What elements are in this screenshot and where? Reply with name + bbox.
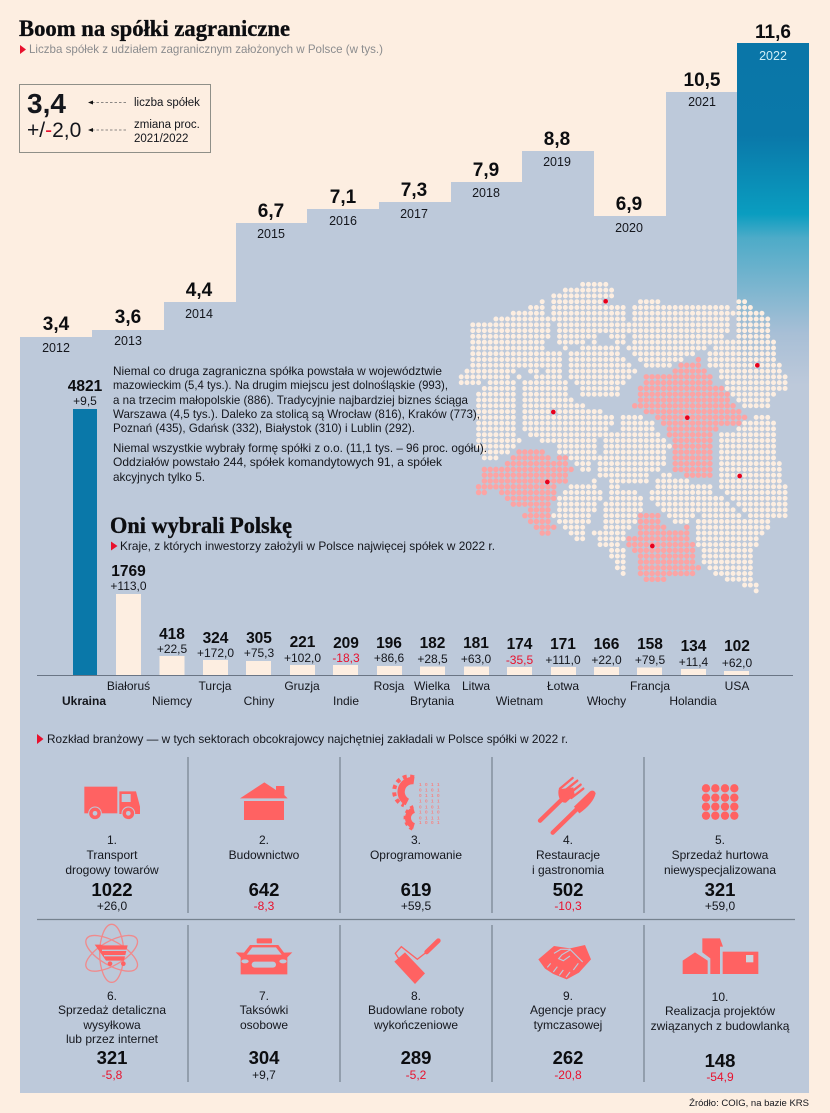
- legend: 2021/2022: [134, 133, 188, 145]
- values: [68, 378, 753, 670]
- values: 418: [159, 626, 185, 643]
- sector 10: construction projects: Realizacja projektów: [665, 1004, 775, 1018]
- sector 3: software: 619: [401, 879, 431, 900]
- step chart values: 3,6: [115, 307, 141, 328]
- sector 7: taxis: Taksówki: [240, 1003, 288, 1017]
- values: 324: [203, 630, 229, 647]
- map of Poland: [461, 284, 785, 591]
- country labels: Wietnam: [496, 694, 543, 708]
- map dots: pink regions: [479, 360, 745, 579]
- icon: gear and binary digits: 1011: [419, 799, 440, 804]
- country labels: Francja: [630, 679, 670, 693]
- sector 8: finishing works: [368, 941, 464, 1082]
- sector 5: wholesale: [664, 784, 776, 913]
- sector 6: online retail: 6.: [107, 989, 117, 1003]
- step chart values: 2020: [615, 221, 643, 235]
- text block: regions: Oddziałów powstało 244, spółek komandytowych 91, a spółek: [113, 455, 443, 469]
- values: 158: [637, 636, 663, 653]
- sector 1: transport: drogowy towarów: [65, 863, 159, 877]
- step chart values: 8,8: [544, 129, 570, 150]
- values: +102,0: [284, 651, 321, 665]
- icon: truck: [84, 787, 140, 820]
- icon: fork and knife: [540, 778, 596, 833]
- country labels: Niemcy: [152, 694, 192, 708]
- subheading: sectors: Rozkład branżowy — w tych sektorach obcokrajowcy najchętniej zakładali w Polsce spółki w 2022 r.: [47, 732, 568, 746]
- sector 1: transport: 1.: [107, 833, 117, 847]
- country labels: Białoruś: [107, 679, 150, 693]
- sector 1: transport: +26,0: [97, 899, 128, 913]
- country labels: Indie: [333, 694, 359, 708]
- sector 7: taxis: 7.: [259, 989, 269, 1003]
- values: +22,5: [157, 642, 188, 656]
- values: 221: [290, 634, 316, 651]
- sector 9: temp agencies: 9.: [563, 989, 573, 1003]
- sector 1: transport: [65, 787, 159, 913]
- icon: gear and binary digits: 1011: [419, 782, 440, 787]
- step chart values: 6,7: [258, 201, 284, 222]
- source: Źródło: COIG, na bazie KRS: [689, 1098, 809, 1109]
- legend: liczba spółek: [134, 97, 200, 109]
- sector 10: construction projects: 148: [705, 1050, 735, 1071]
- values: +28,5: [417, 652, 448, 666]
- sector 5: wholesale: +59,0: [705, 899, 736, 913]
- text block: regions: Poznań (435), Gdańsk (332), Białystok (310) i Lublin (292).: [113, 421, 415, 435]
- values: 102: [724, 638, 750, 655]
- sector 6: online retail: 321: [97, 1047, 127, 1068]
- subtitle: Liczba spółek z udziałem zagranicznym założonych w Polsce (w tys.): [29, 42, 383, 56]
- icon: paint roller: [394, 941, 438, 984]
- step chart values: 2017: [400, 207, 428, 221]
- sector 3: software: [370, 776, 462, 913]
- sector 9: temp agencies: -20,8: [554, 1068, 582, 1082]
- sector 10: construction projects: [651, 938, 790, 1084]
- sector 2: construction: [229, 782, 300, 913]
- values: +86,6: [374, 651, 405, 665]
- values: 1769: [111, 563, 146, 580]
- text block: regions: Niemal co druga zagraniczna spółka powstała w województwie: [113, 364, 442, 378]
- sector 8: finishing works: wykończeniowe: [373, 1018, 458, 1032]
- sector 7: taxis: osobowe: [240, 1018, 288, 1032]
- sector 10: construction projects: 10.: [712, 990, 728, 1004]
- values: 209: [333, 635, 359, 652]
- values: +22,0: [591, 653, 622, 667]
- sector 10: construction projects: związanych z budowlanką: [651, 1019, 790, 1033]
- values: +9,5: [73, 394, 97, 408]
- icon: handshake: [538, 945, 591, 979]
- sector 6: online retail: -5,8: [102, 1068, 123, 1082]
- sector 10: construction projects: -54,9: [706, 1070, 734, 1084]
- country labels: Turcja: [199, 679, 232, 693]
- step chart values: 2021: [688, 95, 716, 109]
- icon: gear and binary digits: 0101: [419, 788, 440, 793]
- values: +111,0: [545, 653, 581, 667]
- text block: regions: a na trzecim małopolskie (886). Tradycyjnie najbardziej biznes ściąga: [113, 393, 468, 407]
- sector 4: restaurants: 502: [553, 879, 583, 900]
- text block: regions: akcyjnych tylko 5.: [113, 470, 205, 484]
- step chart values: 2015: [257, 227, 285, 241]
- sector 5: wholesale: niewyspecjalizowana: [664, 863, 776, 877]
- step chart values: 6,9: [616, 194, 642, 215]
- sector 6: online retail: Sprzedaż detaliczna: [58, 1003, 166, 1017]
- icon: gear and binary digits: [394, 776, 440, 829]
- sector 6: online retail: lub przez internet: [66, 1032, 159, 1046]
- icon: gear and binary digits: 0101: [419, 804, 440, 809]
- values: 4821: [68, 378, 103, 395]
- values: 134: [681, 638, 707, 655]
- sector 2: construction: Budownictwo: [229, 848, 300, 862]
- city markers: [545, 299, 760, 548]
- values: +11,4: [679, 655, 709, 669]
- icon: house: [240, 782, 288, 820]
- values: +75,3: [244, 646, 275, 660]
- country labels: Włochy: [587, 694, 626, 708]
- sector 5: wholesale: Sprzedaż hurtowa: [672, 848, 769, 862]
- step chart values: 7,9: [473, 160, 499, 181]
- step chart values: 10,5: [684, 70, 721, 91]
- country labels: USA: [725, 679, 749, 693]
- values: -35,5: [506, 653, 533, 667]
- sector 4: restaurants: 4.: [563, 833, 573, 847]
- values: +113,0: [110, 579, 147, 593]
- sector 7: taxis: [236, 938, 292, 1082]
- sector 4: restaurants: i gastronomia: [532, 863, 604, 877]
- sector 5: wholesale: 5.: [715, 833, 725, 847]
- sector 1: transport: Transport: [87, 848, 138, 862]
- sector 3: software: +59,5: [401, 899, 432, 913]
- values: +63,0: [461, 652, 492, 666]
- country labels: Rosja: [374, 679, 405, 693]
- values: 196: [376, 635, 402, 652]
- country labels: Brytania: [410, 694, 454, 708]
- values: 171: [550, 636, 576, 653]
- country labels: Holandia: [669, 694, 717, 708]
- text block: regions: Niemal wszystkie wybrały formę spółki z o.o. (11,1 tys. – 96 proc. ogółu).: [113, 441, 487, 455]
- map dots: cream regions: [461, 284, 785, 591]
- sector 9: temp agencies: tymczasowej: [534, 1018, 602, 1032]
- icon: gear and binary digits: 1001: [419, 820, 440, 825]
- icon: dot grid: [702, 784, 738, 820]
- sector 9: temp agencies: Agencje pracy: [530, 1003, 606, 1017]
- text block: regions: Warszawa (4,5 tys.). Daleko za stolicą są Wrocław (816), Kraków (773),: [113, 407, 480, 421]
- icon: taxi: [236, 938, 292, 974]
- step chart values: 2019: [543, 155, 571, 169]
- step chart values: 7,3: [401, 180, 427, 201]
- sector 9: temp agencies: [530, 945, 606, 1082]
- country labels: Ukraina: [62, 694, 106, 708]
- sector 8: finishing works: -5,2: [406, 1068, 427, 1082]
- step chart values: 2022: [759, 49, 787, 63]
- sector 6: online retail: wysyłkowa: [82, 1018, 141, 1032]
- sector 8: finishing works: Budowlane roboty: [368, 1003, 464, 1017]
- heading: countries: Oni wybrali Polskę: [110, 513, 292, 538]
- step chart values: [42, 22, 791, 355]
- values: 182: [420, 635, 445, 652]
- step chart values: 7,1: [330, 187, 357, 208]
- sector 4: restaurants: -10,3: [554, 899, 582, 913]
- step chart values: 2013: [114, 334, 142, 348]
- step chart values: 2012: [42, 341, 70, 355]
- sector 5: wholesale: 321: [705, 879, 735, 900]
- sector 4: restaurants: [532, 778, 604, 913]
- step chart values: 4,4: [186, 280, 213, 301]
- bar: 2022 highlight: [737, 43, 809, 385]
- country labels: Chiny: [244, 694, 274, 708]
- icon: gear and binary digits: 0110: [419, 793, 440, 798]
- text block: regions: mazowieckim (5,4 tys.). Na drugim miejscu jest dolnośląskie (993),: [113, 378, 448, 392]
- sector 9: temp agencies: 262: [553, 1047, 583, 1068]
- country labels: Wielka: [414, 679, 450, 693]
- sector 2: construction: 2.: [259, 833, 269, 847]
- values: 305: [246, 630, 272, 647]
- values: +79,5: [635, 653, 666, 667]
- sector 8: finishing works: 8.: [411, 989, 421, 1003]
- values: -18,3: [332, 651, 360, 665]
- sector 8: finishing works: 289: [401, 1047, 431, 1068]
- values: 174: [507, 636, 533, 653]
- title: Boom na spółki zagraniczne: [19, 16, 290, 41]
- icon: cart in atom: [81, 924, 143, 982]
- legend: 3,4: [27, 88, 66, 119]
- step chart values: 2014: [185, 307, 213, 321]
- step chart values: 11,6: [755, 22, 791, 43]
- country labels: [62, 679, 749, 708]
- values: +62,0: [722, 656, 753, 670]
- step chart values: 3,4: [43, 314, 70, 335]
- values: +172,0: [197, 646, 234, 660]
- sector 3: software: Oprogramowanie: [370, 848, 462, 862]
- legend: [20, 84, 210, 152]
- sector 4: restaurants: Restauracje: [536, 848, 600, 862]
- step chart values: 2018: [472, 186, 500, 200]
- country labels: Gruzja: [284, 679, 320, 693]
- step chart values: 2016: [329, 214, 357, 228]
- values: 181: [463, 635, 489, 652]
- sector 2: construction: 642: [249, 879, 279, 900]
- icon: gear and binary digits: 0111: [419, 815, 440, 820]
- country labels: Łotwa: [547, 679, 579, 693]
- icon: gear and binary digits: 1010: [419, 810, 440, 815]
- sector 6: online retail: [58, 924, 166, 1082]
- subheading: countries: Kraje, z których inwestorzy założyli w Polsce najwięcej spółek w 2022 r.: [120, 539, 495, 553]
- country labels: Litwa: [462, 679, 490, 693]
- bar chart: countries: [37, 378, 793, 708]
- bars: [73, 409, 749, 675]
- sector 3: software: 3.: [411, 833, 421, 847]
- sector 7: taxis: 304: [249, 1047, 280, 1068]
- sector 1: transport: 1022: [91, 879, 133, 900]
- icon: buildings: [683, 938, 758, 974]
- legend: zmiana proc.: [134, 119, 200, 131]
- values: 166: [594, 636, 620, 653]
- text block: regions: [113, 364, 487, 484]
- sector 7: taxis: +9,7: [252, 1068, 276, 1082]
- sector 2: construction: -8,3: [254, 899, 275, 913]
- legend: +/-2,0: [27, 119, 81, 142]
